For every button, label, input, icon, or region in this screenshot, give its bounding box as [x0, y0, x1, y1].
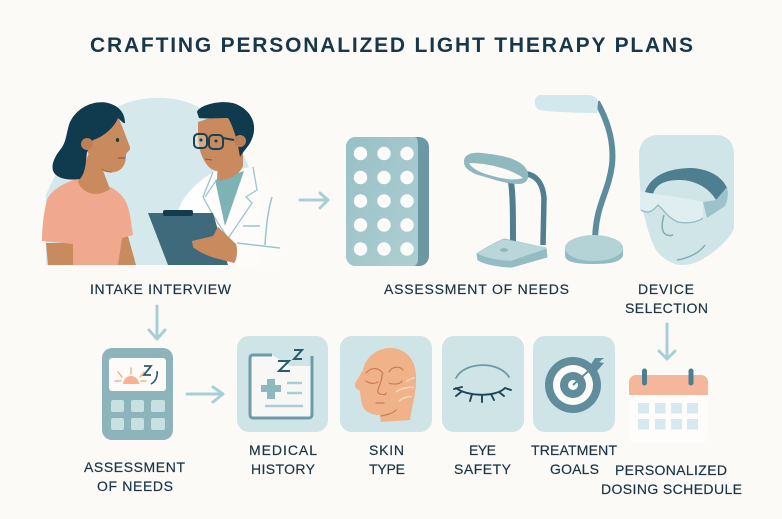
label: personalized dosing schedule: [601, 462, 742, 497]
label: skin type: TYPE: [369, 461, 405, 477]
label: skin type: [369, 442, 405, 477]
label: treatment goals: GOALS: [550, 461, 599, 477]
icon: LED light panel: [346, 137, 429, 266]
icon: desk lamp with ring head: [464, 153, 547, 267]
arrow: interview down to assessment: [149, 306, 165, 339]
label: intake interview: INTAKE INTERVIEW: [90, 281, 232, 297]
label: medical history: MEDICAL: [249, 442, 317, 458]
doctor: [172, 102, 295, 265]
arrow: interview to devices: [300, 193, 328, 208]
panel: treatment goals: [533, 336, 615, 432]
label: medical history: HISTORY: [251, 461, 316, 477]
label: device selection: [625, 281, 708, 316]
arrow: assessment to inputs: [187, 387, 223, 402]
label: assessment of needs (top): ASSESSMENT OF NEEDS: [384, 281, 569, 297]
icon: tall floor lamp: [535, 95, 623, 264]
panel: skin type: [340, 336, 432, 432]
label: medical history: [249, 442, 317, 477]
label: assessment of needs (bottom): OF NEEDS: [97, 478, 173, 494]
clipboard: [148, 210, 228, 265]
icon: face with protective goggles: [639, 135, 734, 265]
label: personalized dosing schedule: DOSING SCHEDULE: [601, 481, 742, 497]
label: assessment of needs (bottom): ASSESSMENT: [84, 459, 185, 475]
label: device selection: DEVICE: [638, 281, 694, 297]
title: CRAFTING PERSONALIZED LIGHT THERAPY PLANS: [90, 34, 693, 57]
label: assessment of needs (bottom): [84, 459, 185, 494]
icon: dosing calendar: [629, 371, 708, 443]
label: skin type: SKIN: [369, 442, 404, 458]
label: eye safety: [454, 442, 512, 477]
label: treatment goals: [531, 442, 617, 477]
label: eye safety: EYE: [469, 442, 496, 458]
arrow: device selection down to schedule: [659, 324, 675, 359]
illustration: intake interview: [42, 98, 295, 265]
hand: [192, 227, 237, 263]
label: eye safety: SAFETY: [454, 461, 512, 477]
label: device selection: SELECTION: [625, 300, 708, 316]
patient: [42, 102, 136, 265]
panel: eye safety: [442, 336, 524, 432]
icon: calculator with sleep and sun display: [102, 348, 173, 440]
background shape: [46, 98, 256, 265]
panel: medical history: [237, 336, 328, 432]
label: personalized dosing schedule: PERSONALIZED: [615, 462, 727, 478]
label: treatment goals: TREATMENT: [531, 442, 617, 458]
